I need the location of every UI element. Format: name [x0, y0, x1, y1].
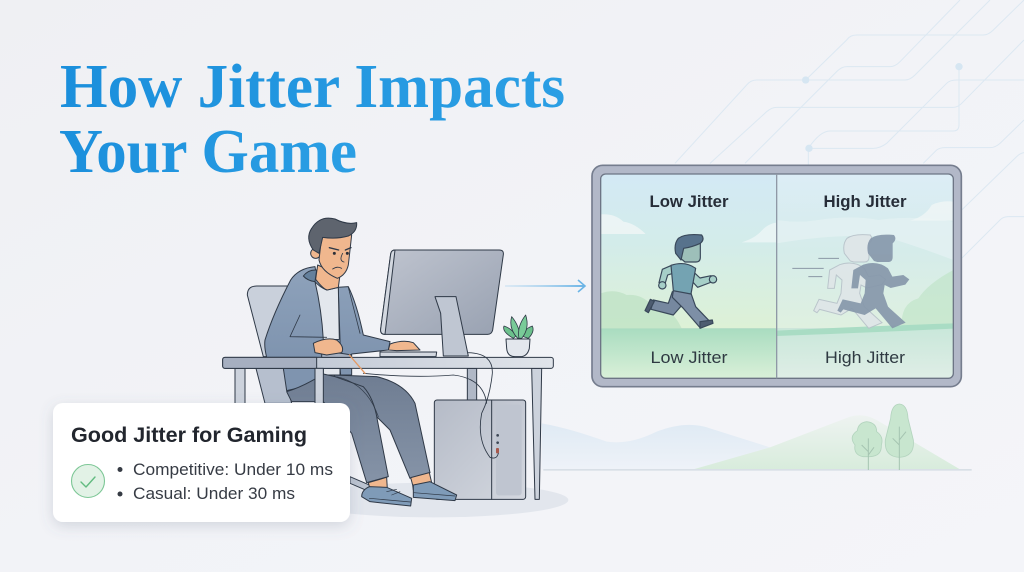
- hands and mouse: [313, 339, 420, 357]
- card list: Competitive: Under 10 ms: [133, 460, 333, 479]
- pc tower: [434, 400, 526, 499]
- screen labels: High Jitter: [825, 348, 905, 367]
- arrow to comparison screen: [505, 280, 585, 292]
- comparison screen: [592, 165, 961, 387]
- high jitter motion lines: [792, 258, 839, 277]
- illustration: person at desk: [223, 218, 568, 517]
- shifted runner: [837, 235, 909, 328]
- panel: high jitter scene: [777, 174, 953, 378]
- person's near leg: [287, 374, 412, 506]
- screen inner border and divider: [601, 174, 953, 378]
- person's torso in hoodie: [265, 267, 390, 391]
- card list: [118, 460, 333, 503]
- desk top: [223, 357, 553, 405]
- low jitter runner: [645, 235, 717, 328]
- panel: low jitter scene: [601, 174, 802, 378]
- floor shadow: [298, 483, 568, 517]
- title: Your Game: [59, 118, 357, 186]
- screen frame: [592, 165, 961, 387]
- potted plant: [504, 315, 533, 357]
- distant landscape with trees: [542, 404, 972, 471]
- card list: Casual: Under 30 ms: [133, 484, 295, 503]
- desk legs: [235, 368, 542, 499]
- person's far leg: [333, 375, 457, 501]
- monitor: [380, 250, 503, 357]
- ghost runner: [814, 235, 886, 328]
- screen labels: High Jitter: [824, 192, 907, 211]
- title: How Jitter Impacts: [60, 53, 565, 121]
- card heading: Good Jitter for Gaming: [71, 423, 307, 447]
- screen labels: Low Jitter: [650, 348, 728, 367]
- screen labels: Low Jitter: [650, 192, 729, 211]
- person's head: [309, 218, 357, 290]
- card: good jitter for gaming: [53, 403, 350, 522]
- background circuit lines: [675, 0, 1024, 258]
- title: [59, 53, 565, 186]
- cables: [349, 353, 498, 458]
- screen labels: [650, 192, 907, 367]
- icon: check circle: [72, 464, 104, 498]
- chair: [247, 286, 390, 493]
